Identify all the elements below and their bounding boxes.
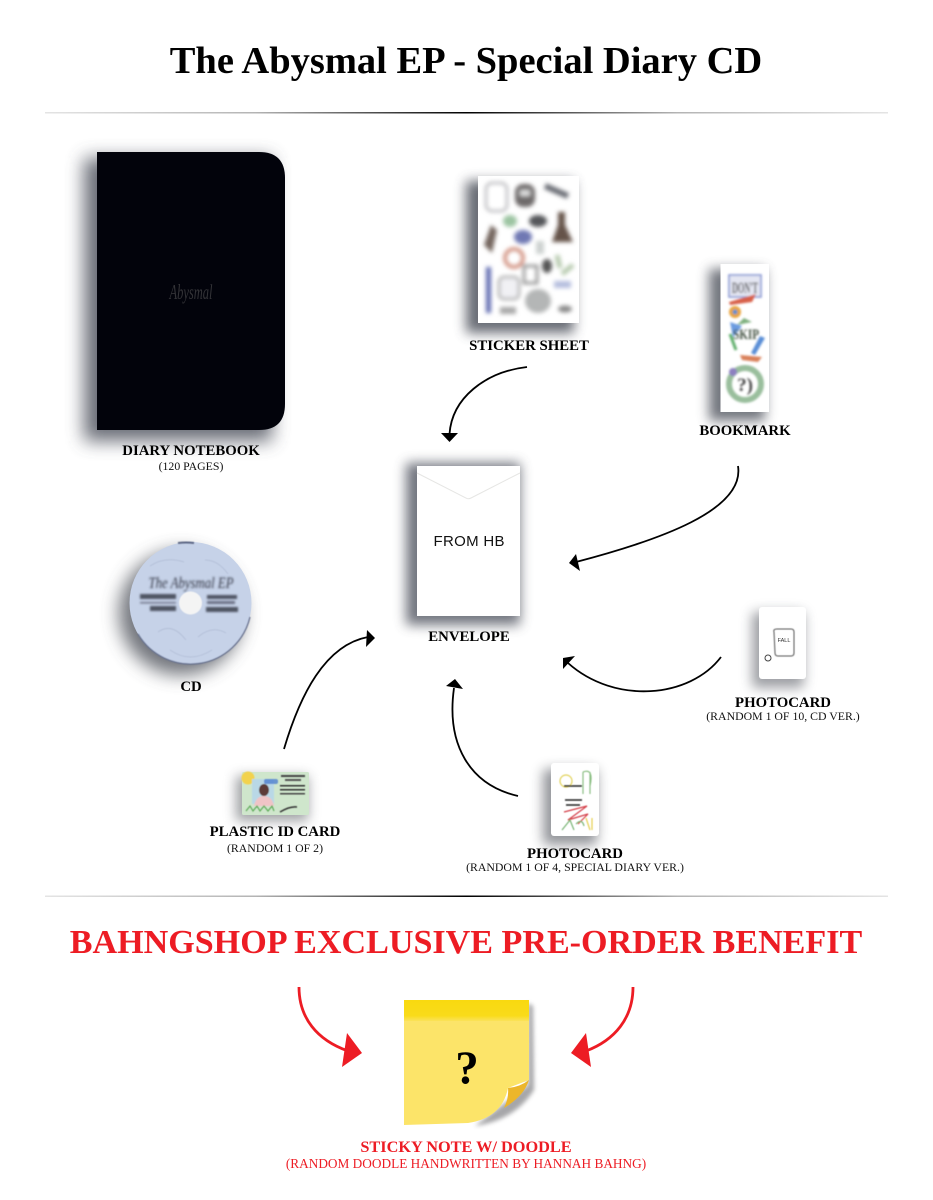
diary cover [97, 152, 285, 430]
sticky note label [286, 1137, 646, 1171]
bookmark doodles: SKIP [733, 327, 759, 343]
bookmark shadow [709, 269, 765, 421]
bookmark doodles: ?) [737, 375, 753, 396]
diary label [122, 443, 260, 473]
CD rim arcs [138, 542, 250, 664]
sticker doodles [484, 183, 573, 314]
envelope [406, 463, 520, 625]
arrow: sticker sheet to envelope [441, 367, 527, 442]
photocard shadow [752, 612, 804, 688]
bookmark label: BOOKMARK [699, 423, 791, 439]
ID card face [242, 772, 309, 815]
diary label: DIARY NOTEBOOK [122, 443, 260, 459]
arrow: red left [299, 987, 362, 1067]
bookmark [709, 264, 769, 421]
plastic ID card label [210, 824, 340, 855]
photocard face [759, 607, 806, 679]
photocard diary label [466, 846, 684, 874]
photocard small text: FALL [778, 638, 790, 644]
sticky note curl [504, 1080, 529, 1108]
plastic ID card [236, 772, 309, 821]
bookmark doodles: DON'T [732, 280, 758, 297]
photocard diary label: PHOTOCARD [527, 846, 623, 862]
CD lettering: The Abysmal EP [148, 575, 234, 592]
diary label: (120 PAGES) [159, 459, 223, 473]
question mark: ? [455, 1042, 479, 1094]
sticker sheet [466, 176, 579, 333]
ID card details [242, 772, 305, 812]
diary notebook [84, 152, 285, 441]
photocard diary label: (RANDOM 1 OF 4, SPECIAL DIARY VER.) [466, 860, 684, 874]
envelope label: ENVELOPE [428, 629, 510, 645]
photocard face [551, 763, 599, 836]
sticker shadow [466, 181, 574, 333]
photocard doodles [560, 771, 592, 830]
arrow: photocard diary to envelope [446, 679, 518, 796]
sticky note shadow [475, 1003, 534, 1126]
sticker sheet paper [478, 176, 579, 323]
sticker sheet label: STICKER SHEET [469, 338, 589, 354]
title: The Abysmal EP - Special Diary CD [170, 40, 762, 82]
photocard CD version [752, 607, 806, 688]
arrow: photocard CD to envelope [563, 656, 721, 691]
sticky note top band [404, 1000, 529, 1021]
plastic ID card label: (RANDOM 1 OF 2) [227, 841, 323, 855]
CD [119, 542, 252, 675]
speech bubble [774, 629, 794, 656]
envelope shadow [406, 463, 520, 625]
diary shadow [84, 158, 272, 441]
photocard CD label [706, 695, 860, 723]
bookmark paper [720, 264, 769, 412]
CD shadow [119, 551, 243, 675]
sticky note label: STICKY NOTE W/ DOODLE [360, 1137, 572, 1156]
envelope flap [417, 473, 520, 499]
sticky note [404, 1000, 534, 1126]
photocard shadow [543, 769, 597, 845]
CD hole [179, 592, 202, 614]
photocard diary version [543, 763, 599, 845]
bookmark doodles [729, 275, 765, 400]
arrow: red right [571, 987, 633, 1067]
arrow: ID card to envelope [284, 630, 375, 749]
ID card shadow [236, 776, 308, 821]
envelope lettering: FROM HB [434, 533, 504, 550]
photocard CD label: PHOTOCARD [735, 695, 831, 711]
plastic ID card label: PLASTIC ID CARD [210, 824, 340, 840]
sticky note label: (RANDOM DOODLE HANDWRITTEN BY HANNAH BAHNG) [286, 1156, 646, 1171]
CD label: CD [180, 679, 202, 695]
photocard CD label: (RANDOM 1 OF 10, CD VER.) [706, 709, 860, 723]
envelope body [417, 466, 520, 616]
CD disc [130, 542, 252, 664]
arrow: bookmark to envelope [569, 466, 738, 571]
sticky note paper [404, 1000, 529, 1125]
benefit heading: BAHNGSHOP EXCLUSIVE PRE-ORDER BENEFIT [70, 924, 862, 961]
diary cover lettering: Abysmal [168, 280, 213, 304]
